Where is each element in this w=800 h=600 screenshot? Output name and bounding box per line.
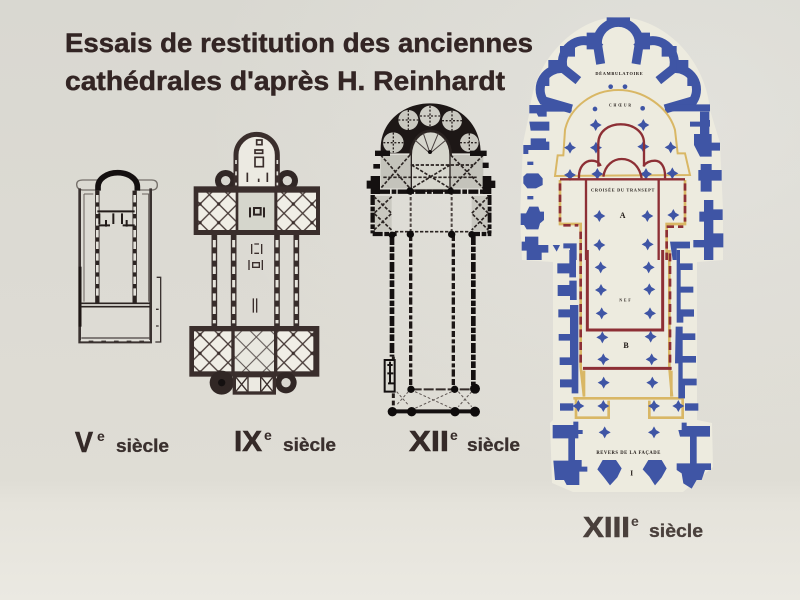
transept outline (77, 180, 157, 190)
labels upper: DÉAMBULATOIRE (595, 71, 643, 76)
upper part (521, 17, 723, 260)
plan: XIIe siècle (367, 103, 495, 417)
title: cathédrales d'après H. Reinhardt (65, 66, 505, 96)
side tower (385, 360, 395, 392)
chevet chapels blue (540, 22, 697, 109)
choir outer blocks (367, 151, 495, 194)
scale bar (155, 277, 161, 342)
label: XIIIe siècle: XIII (583, 512, 630, 544)
aisle thin lines (84, 194, 149, 302)
label: XIIe siècle: e (450, 427, 458, 443)
right wall masses (690, 112, 720, 157)
label: XIIe siècle: siècle (467, 435, 520, 455)
piers (564, 84, 679, 251)
chevet buttresses (521, 17, 723, 260)
lower transept (189, 326, 319, 377)
piers (388, 150, 480, 417)
west towers (210, 371, 234, 395)
choir side bays (381, 155, 411, 188)
inner choir arch (411, 131, 451, 191)
upper transept (194, 186, 320, 235)
label: XIIe siècle (409, 426, 520, 458)
cream silhouette (520, 17, 723, 492)
outer walls (80, 188, 151, 342)
east tower discs (215, 170, 236, 191)
solid left wall (75, 267, 84, 327)
label: XIIIe siècle (583, 512, 703, 544)
upper part: CROISÉE DU TRANSEPT (591, 188, 654, 193)
red nave (587, 250, 663, 330)
gold choir outline (555, 90, 690, 176)
nave walls (214, 235, 296, 327)
nave colonnades (97, 191, 135, 303)
labels lower: NEF (619, 298, 631, 302)
nave outer and inner walls (392, 235, 473, 385)
lower part (553, 250, 711, 489)
title (65, 28, 533, 96)
piers (572, 261, 684, 438)
altar marks (247, 140, 267, 182)
narthex (81, 303, 150, 307)
label: Ve siècle: e (97, 428, 105, 444)
plan: IXe siècle (189, 134, 320, 395)
transept arms (373, 192, 491, 234)
label: IXe siècle (234, 426, 336, 458)
chapel ribs (383, 106, 479, 153)
apse (98, 173, 137, 191)
label: XIIIe siècle: siècle (649, 521, 703, 541)
label: Ve siècle (75, 427, 169, 459)
label: IXe siècle: IX (234, 426, 263, 458)
title: Essais de restitution des anciennes (65, 28, 533, 58)
lower part: REVERS DE LA FAÇADE (596, 451, 660, 456)
nave furnishings (249, 244, 262, 313)
plan: Ve siècle (77, 173, 161, 342)
choir screen (97, 211, 135, 227)
west front towers (553, 422, 587, 485)
gold nave and porch (573, 250, 683, 418)
west porch (233, 374, 276, 395)
upper part: A (620, 211, 626, 220)
red transept and nave (560, 179, 685, 260)
lower part: I (630, 468, 633, 477)
label: Ve siècle: V (75, 427, 94, 459)
red apse and lobes (579, 124, 665, 178)
blue combs (553, 250, 711, 489)
plan: XIIIe siècle (520, 17, 723, 492)
label: IXe siècle: e (264, 427, 272, 443)
label: XIIe siècle: XII (409, 426, 449, 458)
upper part: CHŒUR (609, 103, 631, 107)
label: XIIIe siècle: e (631, 513, 639, 529)
left wall masses (529, 122, 549, 131)
lower part: B (623, 341, 629, 350)
label: IXe siècle: siècle (283, 435, 336, 455)
east apse (236, 134, 277, 187)
label: Ve siècle: siècle (116, 436, 169, 456)
west end (393, 405, 475, 417)
apse ambulatory with chapels (381, 103, 481, 153)
